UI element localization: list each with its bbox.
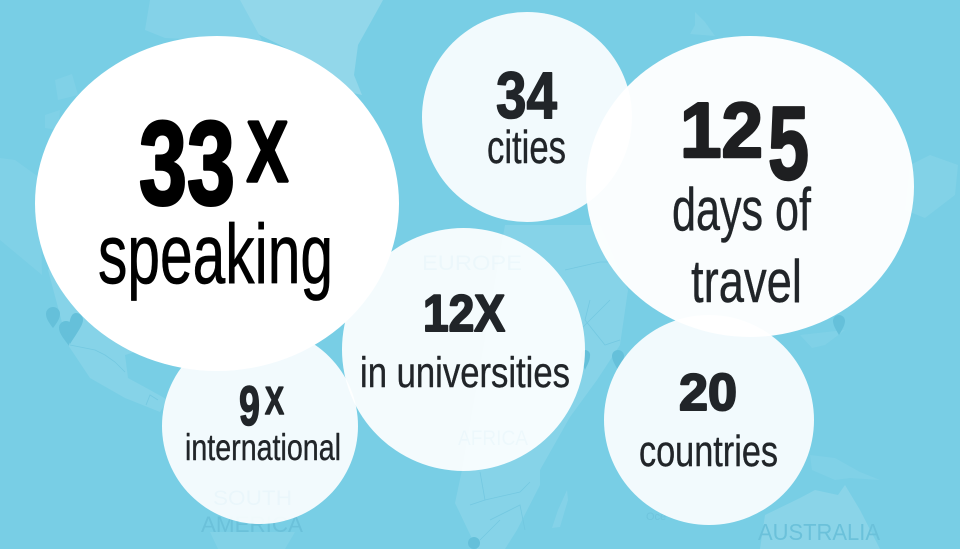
bubble: 34 cities [422,12,632,222]
bubble: 12x in universities: EUROPE [422,252,522,275]
bubble: 12x in universities [342,228,585,471]
bubble: 33x speaking [35,36,399,371]
country borders [70,262,620,540]
bubble: 9x international: X [265,380,284,423]
bubble: 20 countries [604,315,814,525]
map pins [46,307,845,549]
bubble: 125 days of travel: 5 [768,86,809,202]
bubble: 20 countries: countries [639,427,778,476]
bubble: 9x international: 9 [239,374,260,437]
bubble: 33x speaking: 33 [139,97,235,230]
bubble: 125 days of travel: days of [672,176,811,243]
world map backdrop: Oce [646,511,666,523]
world map backdrop: AUSTRALIA [758,519,881,545]
bubble: 9x international: international [185,427,341,468]
bubble: 9x international [162,328,358,524]
bubble: 34 cities: 34 [496,58,557,132]
bubble: 34 cities: cities [487,121,566,173]
bubble: 12x in universities: 12X [423,285,505,343]
bubble: 12x in universities: AFRICA [458,427,528,450]
bubble: 125 days of travel: 12 [680,86,763,174]
bubble: 33x speaking: speaking [98,207,333,301]
bubble: 33x speaking: X [247,105,288,200]
bubble: 125 days of travel: travel [691,248,802,315]
bubble: 20 countries: 20 [679,364,737,422]
map labels: AMERICA [201,512,303,537]
bubble: 125 days of travel [586,36,914,337]
bubble: 12x in universities: in universities [360,349,570,397]
bubble: 9x international: SOUTH [213,487,292,510]
